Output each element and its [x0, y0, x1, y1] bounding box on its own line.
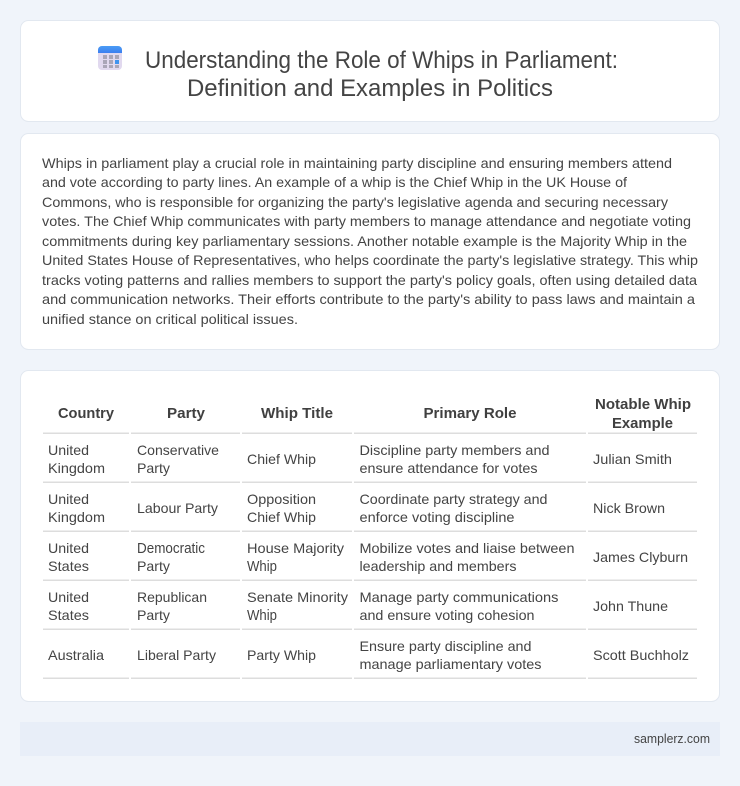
table row: United Kingdom, Labour Party: Chief Whip	[247, 509, 316, 525]
text block: description paragraph: commitments during key parliamentary sessions. Another notable example is the Majority Whip in the	[42, 233, 687, 249]
table row: Australia, Liberal Party	[48, 638, 689, 672]
table header row: Notable Whip	[595, 396, 691, 413]
table header row: Party	[167, 405, 206, 422]
table row: United Kingdom, Labour Party: Kingdom	[48, 509, 105, 525]
text block: description paragraph: and communication networks. Their efforts contribute to the party's ability to pass laws and maintain a	[42, 291, 695, 307]
text block: description paragraph: votes. The Chief Whip communicates with party members to manage attendance and negotiate voting	[42, 213, 691, 229]
text block: description paragraph: unified stance on critical political issues.	[42, 311, 298, 327]
text block: description paragraph: Commons, who is responsible for organizing the party's legislative agenda and securing necessary	[42, 194, 668, 210]
table row: United States, Republican Party: United	[48, 589, 89, 605]
table row: United States, Democratic Party: James Clyburn	[593, 549, 688, 565]
table row: United Kingdom, Labour Party: Coordinate party strategy and	[360, 491, 548, 507]
table row: United Kingdom, Conservative Party: Julian Smith	[593, 451, 672, 467]
text block: description paragraph: United States House of Representatives, who helps coordinate the party's legislative strategy. This whip	[42, 252, 698, 268]
table row: United Kingdom, Labour Party: Opposition	[247, 491, 316, 507]
table row: United Kingdom, Labour Party: Labour Party	[137, 500, 218, 516]
table row: United States, Republican Party: Republican	[137, 589, 207, 605]
table row: United States, Republican Party: Whip	[247, 608, 277, 624]
title	[145, 47, 618, 102]
text block: description paragraph	[42, 155, 698, 327]
table row: Australia, Liberal Party: Liberal Party	[137, 647, 216, 663]
table row: Australia, Liberal Party: manage parliamentary votes	[360, 656, 542, 672]
table row: United States, Republican Party: Senate Minority	[247, 589, 348, 605]
table header row: Primary Role	[424, 405, 516, 422]
table row: Australia, Liberal Party: Australia	[48, 647, 104, 663]
title: Definition and Examples in Politics	[187, 75, 553, 102]
header card	[20, 20, 720, 122]
table row: United Kingdom, Conservative Party: Party	[137, 460, 170, 476]
table row: Australia, Liberal Party: Party Whip	[247, 647, 316, 663]
table header row: Country	[58, 405, 115, 422]
table header row: Example	[612, 415, 673, 432]
table row: United States, Democratic Party: States	[48, 558, 89, 574]
table row: United Kingdom, Labour Party: enforce voting discipline	[360, 509, 515, 525]
table row: United Kingdom, Labour Party	[48, 491, 665, 525]
table row: United Kingdom, Conservative Party: Kingdom	[48, 460, 105, 476]
table row: United Kingdom, Conservative Party: Discipline party members and	[360, 442, 550, 458]
table row: United Kingdom, Conservative Party: Conservative	[137, 442, 219, 458]
title: Understanding the Role of Whips in Parliament:	[145, 47, 618, 74]
footer source text: samplerz.com	[634, 732, 710, 746]
table row: United Kingdom, Conservative Party	[48, 442, 672, 476]
table row: United States, Republican Party	[48, 589, 668, 624]
table row: United Kingdom, Conservative Party: ensure attendance for votes	[360, 460, 538, 476]
table row: United Kingdom, Conservative Party: United	[48, 442, 89, 458]
table header row	[58, 396, 691, 432]
table row: United States, Republican Party: John Thune	[593, 598, 668, 614]
table row: United States, Democratic Party: Democratic	[137, 541, 205, 557]
text block: description paragraph: and vote according to party lines. An example of a whip is the Chief Whip in the UK House of	[42, 174, 627, 190]
text block: description paragraph: Whips in parliament play a crucial role in maintaining party discipline and ensuring members attend	[42, 155, 672, 171]
table row: United States, Republican Party: Manage party communications	[360, 589, 558, 605]
table row: United States, Republican Party: and ensure voting cohesion	[360, 607, 534, 623]
text block: description paragraph: tracks voting patterns and rallies members to support the party's policy goals, often using detailed data	[42, 272, 697, 288]
table row: United States, Democratic Party: United	[48, 540, 89, 556]
icon: calendar	[98, 46, 122, 70]
table row: United States, Republican Party: Party	[137, 607, 170, 623]
panel: whip comparison table	[20, 370, 720, 702]
table row: Australia, Liberal Party: Scott Buchholz	[593, 647, 689, 663]
table row: United States, Democratic Party: Party	[137, 558, 170, 574]
table header row: Whip Title	[261, 405, 333, 422]
panel: description	[20, 134, 720, 350]
table row: United States, Democratic Party: Mobilize votes and liaise between	[360, 540, 574, 556]
table row: United States, Republican Party: States	[48, 607, 89, 623]
table row: Australia, Liberal Party: Ensure party discipline and	[360, 638, 532, 654]
table row: United Kingdom, Conservative Party: Chief Whip	[247, 451, 316, 467]
table row: United Kingdom, Labour Party: United	[48, 491, 89, 507]
table row: United States, Democratic Party	[48, 540, 688, 575]
footer	[20, 722, 720, 756]
table row: United States, Democratic Party: leadership and members	[360, 558, 516, 574]
table row: United Kingdom, Labour Party: Nick Brown	[593, 500, 665, 516]
table row: United States, Democratic Party: House Majority	[247, 540, 344, 556]
table row: United States, Democratic Party: Whip	[247, 559, 277, 575]
